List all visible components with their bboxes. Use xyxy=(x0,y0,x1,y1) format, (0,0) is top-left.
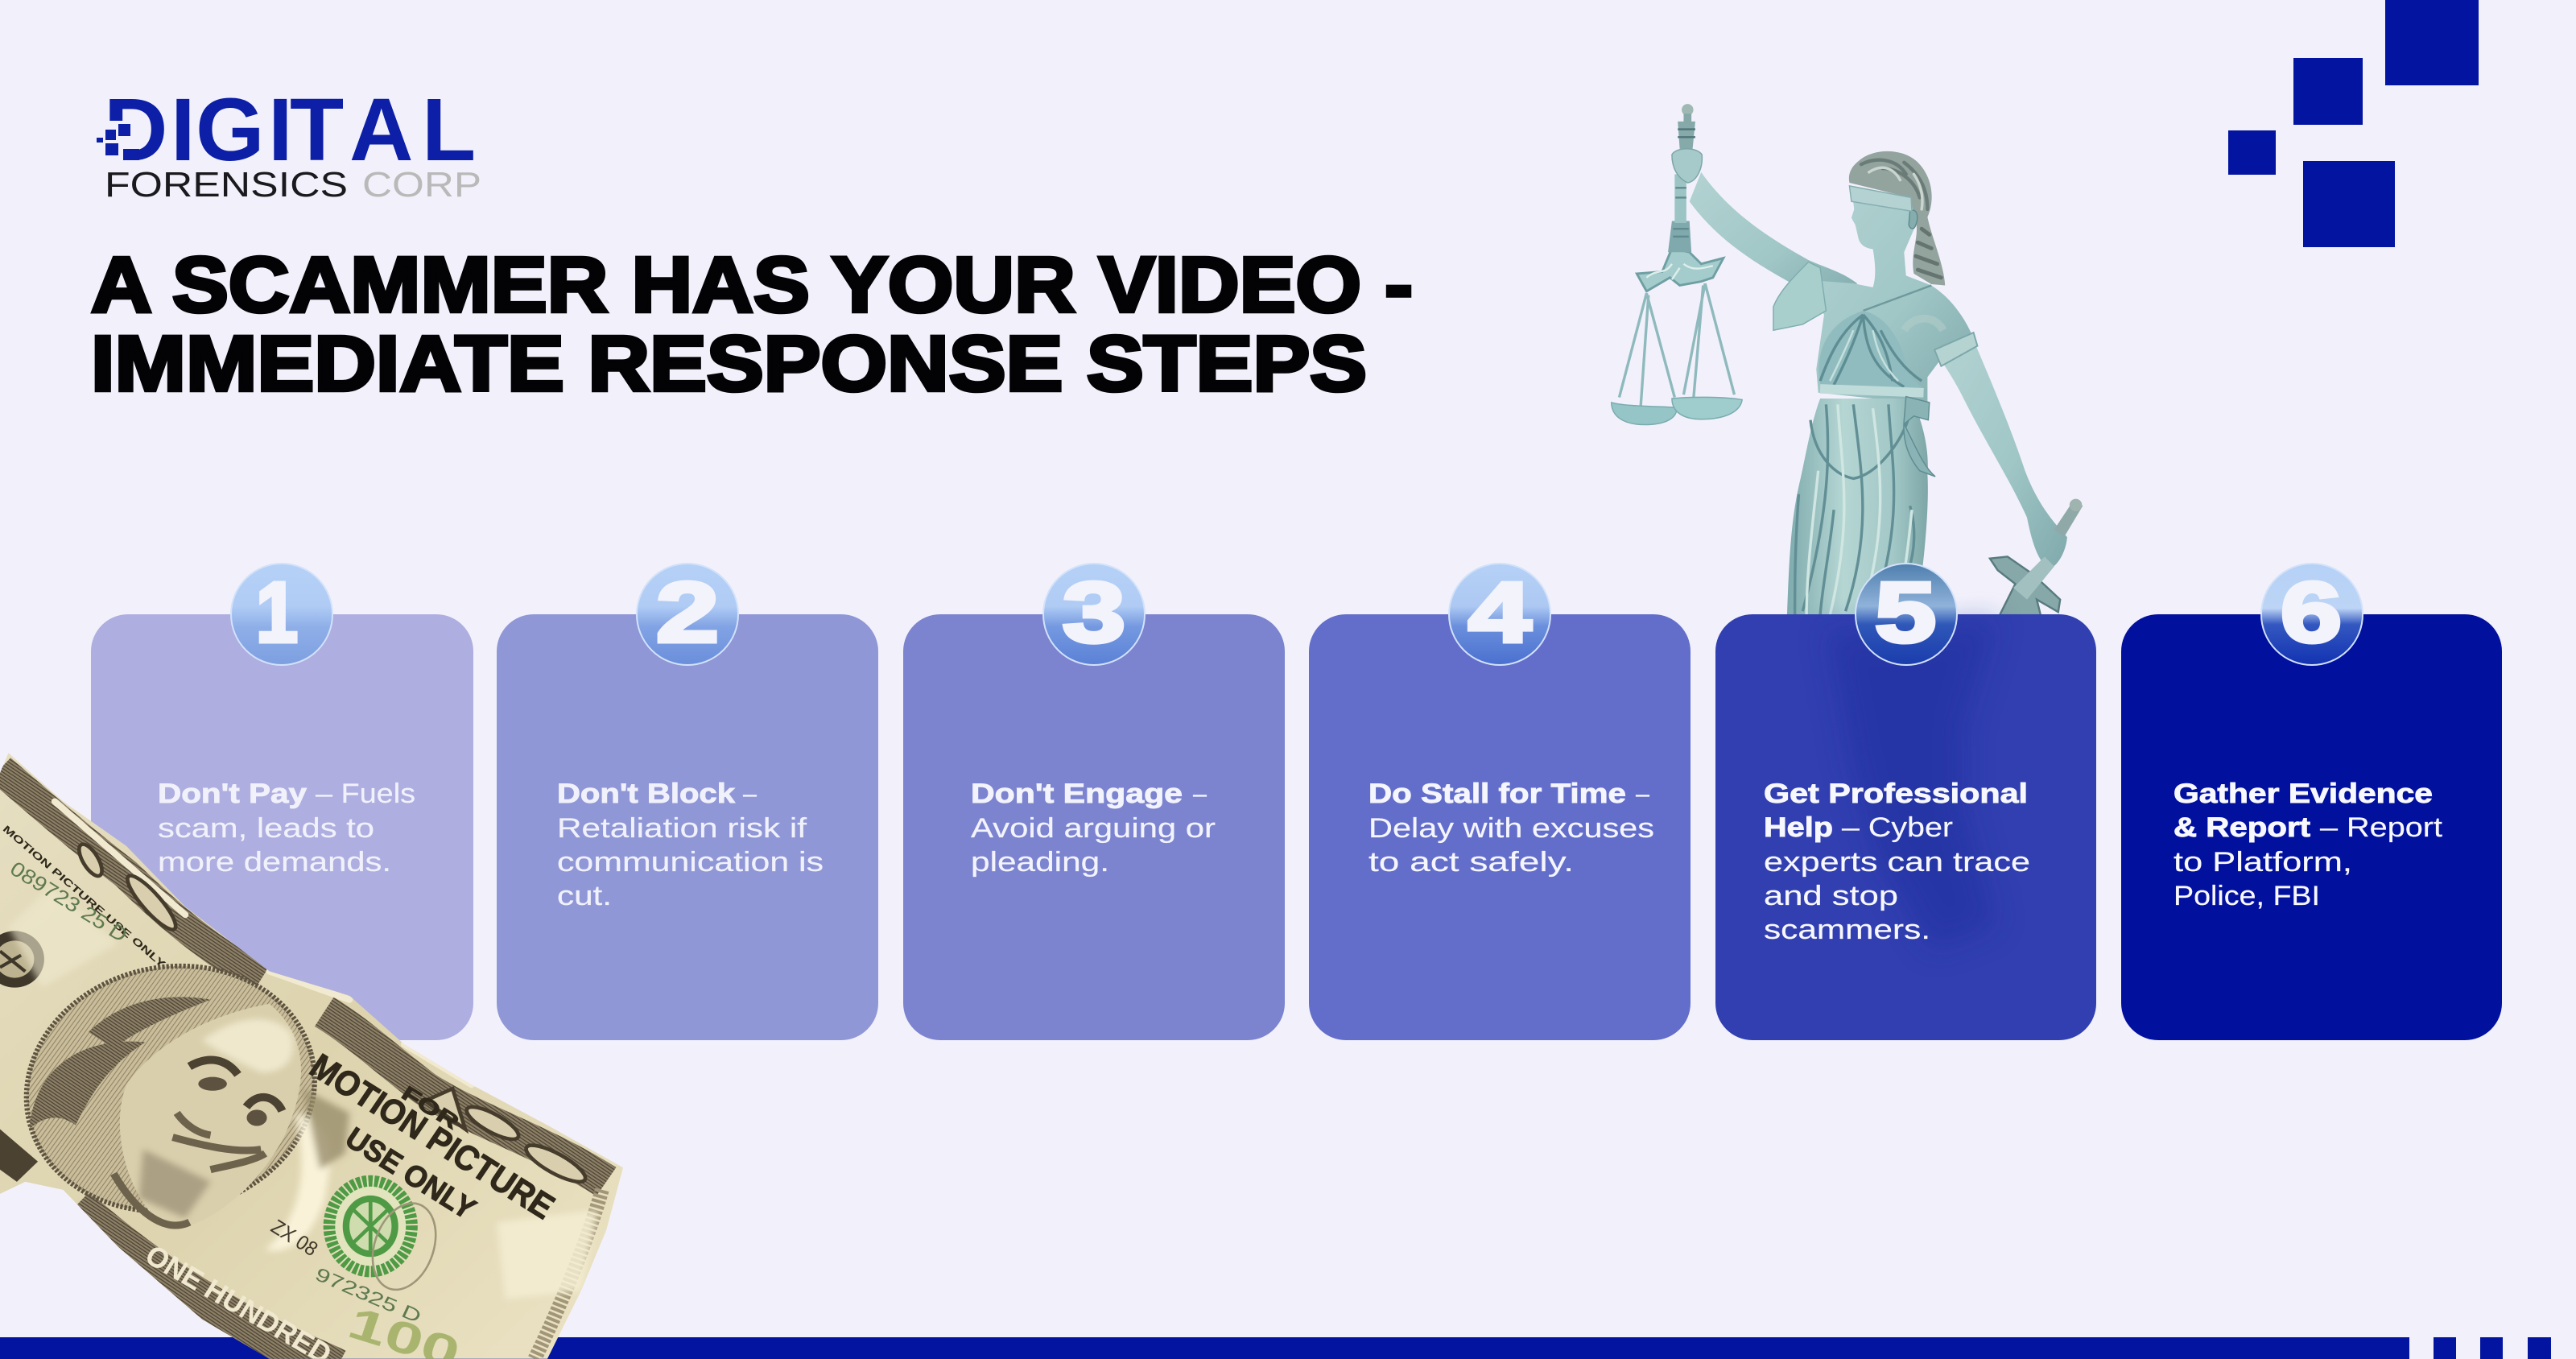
raised arm and hand xyxy=(1672,149,1857,315)
logo wordmark: DIGITAL: DIGITAL xyxy=(104,81,476,180)
decorative squares: top right xyxy=(2228,0,2479,247)
scales xyxy=(1612,104,1742,425)
badge 3: 3 xyxy=(1063,565,1125,660)
card 6: Gather Evidence & Report: Gather Evidence xyxy=(2174,779,2433,809)
serial numbers: ZX 08 xyxy=(266,1216,322,1261)
sword xyxy=(1990,499,2083,615)
serial numbers: 972325 D xyxy=(312,1264,424,1327)
armband xyxy=(1934,333,1977,366)
crumple shading xyxy=(8,886,598,1299)
bill lettering: MOTION PICTURE USE ONLY xyxy=(1,824,167,969)
sleeve xyxy=(1773,262,1826,330)
card 6: Gather Evidence & Report: & Report xyxy=(2174,812,2310,843)
step cards xyxy=(91,614,2502,1040)
badge 2: 2 xyxy=(656,565,719,660)
brows, eyes and creases xyxy=(189,1060,282,1111)
statue shadow in card 5 xyxy=(1827,620,1996,950)
card 4: Do Stall for Time: Do Stall for Time xyxy=(1368,779,1626,809)
card 5: Get Professional Help: Help xyxy=(1764,812,1833,843)
card 1: Don't Pay: more demands. xyxy=(158,847,391,878)
card 2: Don't Block: – xyxy=(743,779,757,809)
serial numbers xyxy=(6,857,424,1327)
bill lettering: USE ONLY xyxy=(339,1121,481,1226)
hair curls xyxy=(1861,160,1941,278)
card 5: Get Professional Help: – Cyber xyxy=(1842,812,1953,843)
serial numbers: 089723 25 D xyxy=(6,857,131,947)
logo wordmark: CORP: CORP xyxy=(362,165,481,204)
portrait oval xyxy=(0,963,317,1229)
card 3: Don't Engage: – xyxy=(1193,779,1207,809)
card 4: Do Stall for Time: to act safely. xyxy=(1368,847,1574,878)
badge 1 xyxy=(231,564,332,665)
step number badges xyxy=(231,564,2363,665)
belt tie xyxy=(1904,397,1935,477)
hair masses xyxy=(30,1042,145,1129)
ear and face shade xyxy=(1909,210,1918,229)
logo: Digital Forensics Corp xyxy=(95,81,481,204)
card 3: Don't Engage: Avoid arguing or xyxy=(971,813,1216,844)
face xyxy=(120,1004,301,1230)
logo wordmark: FORENSICS: FORENSICS xyxy=(105,165,348,204)
blindfold xyxy=(1849,186,1912,211)
torso and neck xyxy=(1802,196,1976,404)
bill lettering xyxy=(1,824,561,1359)
bill dark bands xyxy=(0,769,606,1359)
card 4: Do Stall for Time xyxy=(1309,614,1690,1040)
card 4: Do Stall for Time: – xyxy=(1636,779,1649,809)
badge 5: 5 xyxy=(1875,565,1936,660)
bill lettering: MOTION PICTURE xyxy=(303,1047,561,1227)
crumpled hundred dollar bill xyxy=(0,725,660,1359)
card 2: Don't Block xyxy=(497,614,878,1040)
title: IMMEDIATE RESPONSE STEPS xyxy=(91,320,1367,407)
green treasury seal xyxy=(329,1181,447,1298)
card 1: Don't Pay: Don't Pay xyxy=(158,779,307,809)
card 6: Gather Evidence & Report xyxy=(2121,614,2502,1040)
card 5: Get Professional Help xyxy=(1715,614,2096,1040)
card 3: Don't Engage xyxy=(903,614,1285,1040)
rear arm, hand xyxy=(1939,342,2067,568)
card 2: Don't Block: Don't Block xyxy=(557,779,735,809)
card 2: Don't Block: communication is xyxy=(557,847,824,878)
hair xyxy=(1849,151,1945,285)
card 5: Get Professional Help: scammers. xyxy=(1764,915,1930,945)
card 1: Don't Pay: – Fuels xyxy=(316,779,415,809)
light creases along band xyxy=(55,801,472,1084)
card 5: Get Professional Help: experts can trace xyxy=(1764,847,2030,878)
neckline and bodice xyxy=(1818,285,1943,389)
card 2: Don't Block: cut. xyxy=(557,881,612,911)
card 4: Do Stall for Time: Delay with excuses xyxy=(1368,813,1654,844)
badge 6 xyxy=(2261,564,2363,665)
badge 1: 1 xyxy=(256,565,298,660)
badge 3 xyxy=(1043,564,1145,665)
bill lettering: FOR xyxy=(398,1082,463,1134)
badge 5 xyxy=(1856,564,1957,665)
bottom bar with squares xyxy=(0,1337,2551,1359)
statue: Lady Justice with scales and sword xyxy=(1612,104,2083,617)
numerals on the band xyxy=(75,841,590,1188)
card 3: Don't Engage: pleading. xyxy=(971,847,1109,878)
card 6: Gather Evidence & Report: – Report xyxy=(2320,812,2443,843)
card 5: Get Professional Help: Get Professional xyxy=(1764,779,2028,809)
card 1: Don't Pay xyxy=(91,614,473,1040)
treasury seal xyxy=(0,931,44,988)
title: A SCAMMER HAS YOUR VIDEO - xyxy=(91,241,1413,328)
badge 4 xyxy=(1449,564,1550,665)
skirt xyxy=(1787,399,1928,617)
badge 6: 6 xyxy=(2281,565,2342,660)
card 3: Don't Engage: Don't Engage xyxy=(971,779,1183,809)
card 5: Get Professional Help: and stop xyxy=(1764,881,1898,911)
title xyxy=(91,241,1413,407)
drapery folds xyxy=(1795,389,1924,615)
forehead highlight xyxy=(202,1019,293,1072)
card 6: Gather Evidence & Report: Police, FBI xyxy=(2174,881,2320,911)
card 2: Don't Block: Retaliation risk if xyxy=(557,813,807,844)
badge 2 xyxy=(637,564,738,665)
logo icon: pixel blocks cut into D xyxy=(95,121,139,161)
card 1: Don't Pay: scam, leads to xyxy=(158,813,374,844)
badge 4: 4 xyxy=(1468,565,1531,660)
card 6: Gather Evidence & Report: to Platform, xyxy=(2174,847,2352,878)
